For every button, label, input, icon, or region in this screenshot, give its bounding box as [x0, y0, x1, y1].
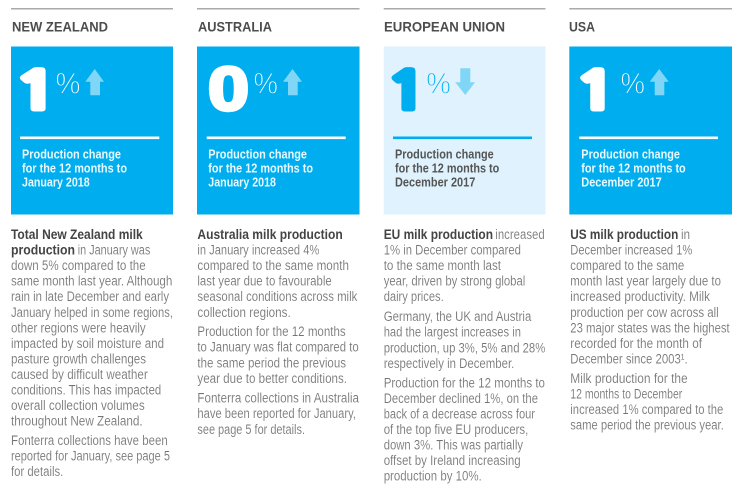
panel: European Union	[384, 8, 546, 484]
body text: European Union: down 3%. This was partially	[384, 438, 523, 452]
body text: USA: Milk production for the	[570, 371, 688, 386]
body text: New Zealand: caused by difficult weather	[11, 367, 148, 382]
big number: 1	[14, 65, 59, 117]
body text: USA: in	[681, 227, 690, 242]
body text: European Union: back of a decrease across four	[384, 406, 535, 421]
body text: Australia: last year due to favourable	[197, 274, 332, 289]
body text: Australia: in January increased 4%	[197, 242, 319, 258]
body text: Australia: Fonterra collections in Australia	[197, 391, 359, 406]
caption: for the 12 months to	[22, 161, 127, 175]
panel: Australia	[197, 8, 360, 437]
body text: USA: December since 2003¹.	[570, 351, 688, 366]
body text: USA: US milk production	[570, 227, 678, 242]
icon: up arrow	[85, 69, 104, 95]
body text: European Union: year, driven by strong global	[384, 274, 525, 289]
body text: USA: compared to the same	[570, 258, 684, 273]
caption: Production change	[395, 147, 494, 161]
body text: European Union: had the largest increases in	[384, 325, 521, 340]
body text: New Zealand: January helped in some regions,	[11, 305, 173, 320]
heading: European Union: EUROPEAN UNION	[384, 18, 505, 34]
body text: USA: production per cow across all	[570, 305, 719, 320]
body text: New Zealand: for details.	[11, 464, 63, 479]
body text: New Zealand: rain in late December and early	[11, 289, 169, 304]
heading: USA: USA	[569, 18, 595, 34]
body text: New Zealand: overall collection volumes	[11, 398, 145, 413]
body text: USA: month last year largely due to	[570, 274, 721, 289]
card: Australia production change	[197, 46, 360, 214]
caption: for the 12 months to	[208, 161, 313, 175]
body text: New Zealand: Total New Zealand milk	[11, 227, 143, 242]
body text: European Union: production, up 3%, 5% and 28%	[384, 340, 545, 355]
body text: European Union	[384, 227, 545, 484]
caption	[395, 147, 500, 189]
caption	[581, 147, 686, 189]
card: New Zealand production change	[11, 46, 173, 214]
caption: January 2018	[22, 175, 90, 189]
panel: New Zealand	[11, 8, 173, 479]
caption: Production change	[208, 147, 307, 161]
heading: Australia: AUSTRALIA	[198, 18, 272, 34]
panel: USA	[569, 8, 732, 433]
body text: New Zealand: throughout New Zealand.	[11, 414, 143, 429]
caption: December 2017	[581, 175, 662, 189]
icon: down arrow	[455, 68, 475, 95]
body text: New Zealand: down 5% compared to the	[11, 258, 146, 273]
body text: European Union: EU milk production	[384, 227, 493, 242]
body text: European Union: Production for the 12 months to	[384, 375, 545, 390]
body text: New Zealand: impacted by soil moisture and	[11, 336, 164, 351]
big number: 0	[208, 55, 249, 123]
body text: European Union: increased	[495, 227, 545, 242]
body text: European Union: 1% in December compared	[384, 242, 521, 258]
body text: USA	[570, 227, 730, 433]
body text: European Union: Germany, the UK and Austria	[384, 309, 532, 324]
body text: European Union: production by 10%.	[384, 469, 482, 484]
body text: Australia	[197, 227, 359, 437]
icon: up arrow	[283, 69, 302, 95]
caption: January 2018	[208, 175, 276, 189]
body text: Australia: see page 5 for details.	[197, 422, 305, 437]
body text: Australia: the same period the previous	[197, 355, 346, 370]
body text: New Zealand: reported for January, see page 5	[11, 448, 170, 464]
body text: Australia: to January was flat compared to	[197, 340, 359, 355]
body text: Australia: Australia milk production	[197, 227, 343, 242]
percent sign: %	[56, 68, 80, 100]
body text: Australia: seasonal conditions across milk	[197, 289, 358, 304]
caption: Production change	[581, 147, 680, 161]
percent sign: %	[426, 68, 451, 100]
body text: USA: increased productivity. Milk	[570, 289, 710, 304]
body text: European Union: to the same month last	[384, 258, 501, 273]
body text: European Union: of the top five EU producers,	[384, 422, 528, 437]
body text: Australia: Production for the 12 months	[197, 324, 346, 339]
body text: USA: recorded for the month of	[570, 336, 702, 351]
body text: European Union: dairy prices.	[384, 289, 444, 304]
caption: Production change	[22, 147, 121, 161]
big number: 1	[574, 65, 617, 117]
body text: European Union: December declined 1%, on the	[384, 391, 538, 406]
heading: New Zealand: NEW ZEALAND	[12, 18, 108, 34]
body text: USA: 12 months to December	[570, 386, 683, 402]
body text: New Zealand: same month last year. Although	[11, 274, 172, 289]
body text: European Union: respectively in December.	[384, 356, 514, 371]
caption: for the 12 months to	[581, 161, 686, 175]
body text: New Zealand: other regions were heavily	[11, 320, 146, 335]
caption	[22, 147, 127, 189]
body text: USA: December increased 1%	[570, 242, 692, 258]
percent sign: %	[254, 68, 278, 100]
body text: New Zealand: conditions. This has impacted	[11, 382, 161, 398]
body text: Australia: compared to the same month	[197, 258, 349, 273]
caption	[208, 147, 313, 189]
body text: New Zealand: Fonterra collections have been	[11, 433, 168, 448]
body text: European Union: offset by Ireland increasing	[384, 453, 521, 468]
body text: New Zealand: in January was	[78, 242, 151, 258]
body text: Australia: year due to better conditions.	[197, 371, 347, 386]
body text: New Zealand	[11, 227, 173, 479]
body text: New Zealand: pasture growth challenges	[11, 351, 146, 366]
icon: up arrow	[650, 69, 669, 95]
card: USA production change	[569, 46, 732, 214]
card: European Union production change	[384, 46, 546, 214]
big number: 1	[386, 65, 428, 117]
body text: New Zealand: production	[11, 242, 75, 258]
percent sign: %	[620, 68, 645, 100]
body text: Australia: collection regions.	[197, 305, 291, 320]
caption: for the 12 months to	[395, 161, 500, 175]
body text: Australia: have been reported for January,	[197, 406, 356, 421]
caption: December 2017	[395, 175, 475, 189]
